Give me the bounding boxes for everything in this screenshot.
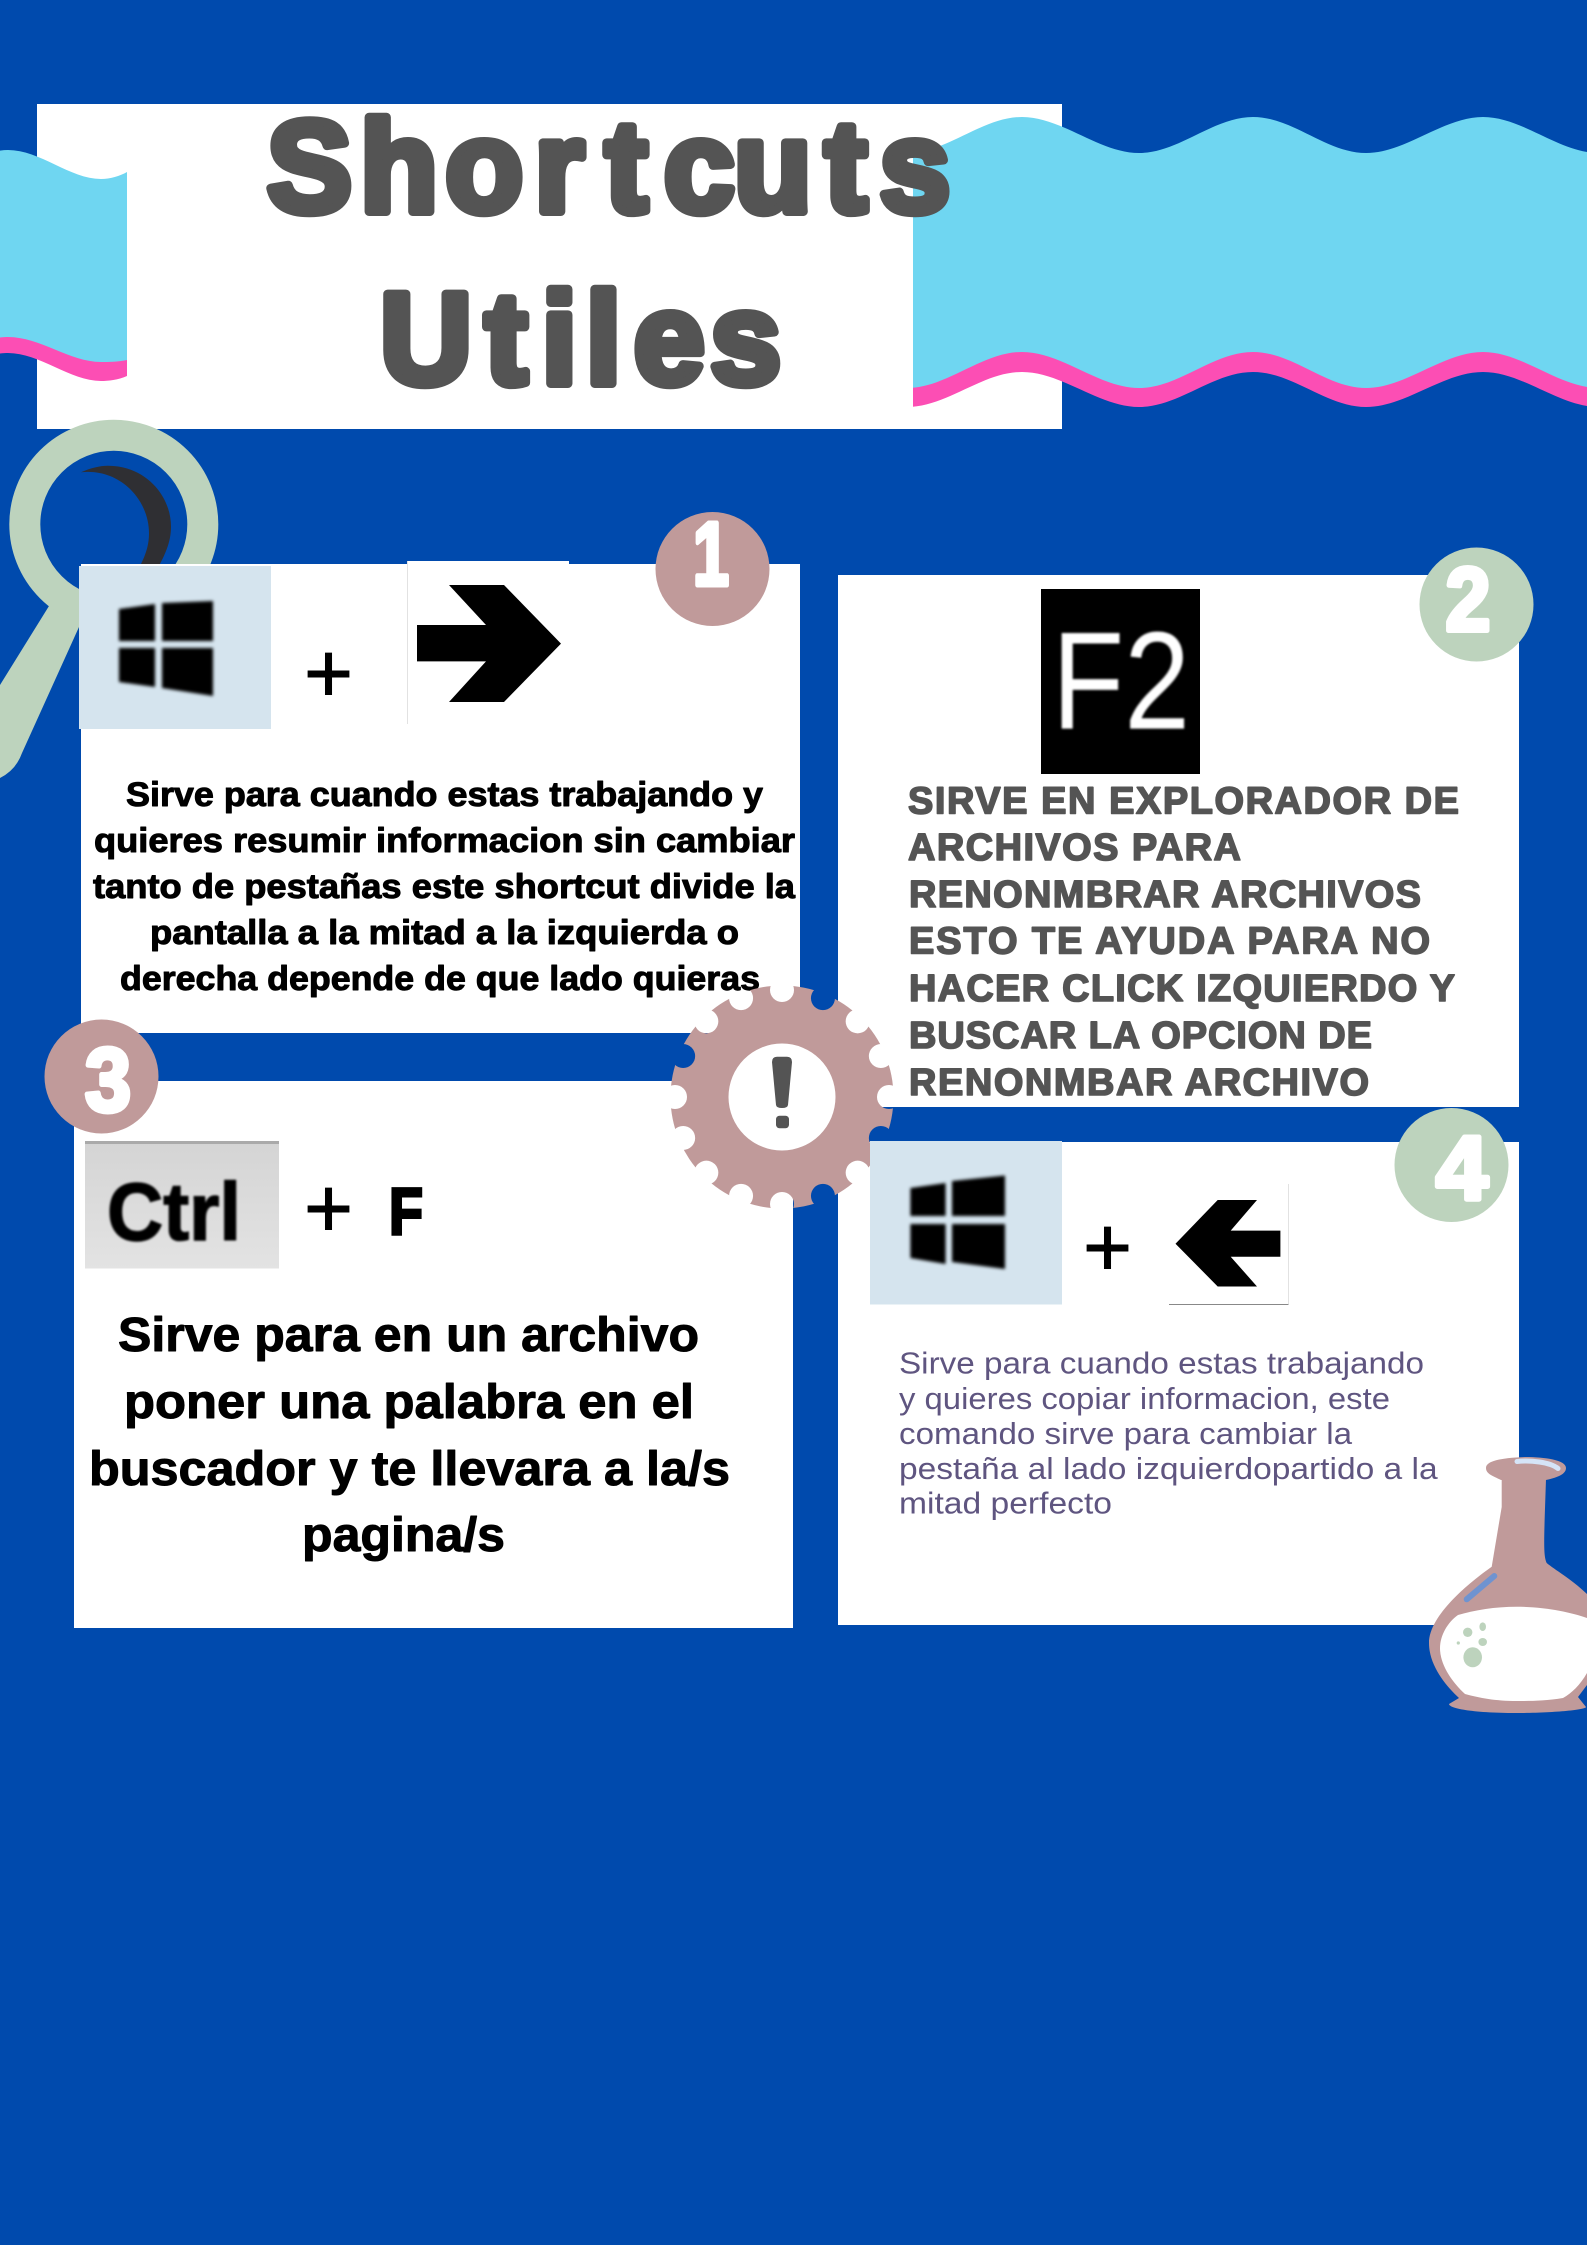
description 1: quieres resumir informacion sin cambiar — [94, 822, 795, 860]
panel 1 background — [81, 564, 800, 1033]
description 2: BUSCAR LA OPCION DE — [909, 1015, 1372, 1057]
key: F: F — [389, 1174, 423, 1248]
description 3: Sirve para en un archivo — [118, 1309, 699, 1362]
badge 2 — [1420, 548, 1534, 662]
description 1: Sirve para cuando estas trabajando y — [126, 776, 763, 814]
panel 2: F2 — [838, 548, 1534, 1107]
icon: magnifying glass — [0, 435, 203, 778]
description 2: HACER CLICK IZQUIERDO Y — [909, 968, 1455, 1010]
description 3 — [89, 1309, 730, 1562]
panel 4: windows + left arrow — [870, 1108, 1508, 1520]
title: Utiles — [380, 266, 781, 412]
icon: flask — [1429, 1457, 1587, 1713]
key: windows — [79, 566, 271, 729]
description 2 — [908, 780, 1459, 1104]
panel 1: windows + right arrow — [79, 505, 800, 1033]
description 2: ARCHIVOS PARA — [908, 827, 1241, 869]
description 3: buscador y te llevara a la/s — [89, 1443, 730, 1496]
wave banner: right — [907, 117, 1587, 407]
panel 3 background — [74, 1081, 793, 1628]
description 4: pestaña al lado izquierdopartido a la — [899, 1451, 1438, 1486]
icon: warning gear — [671, 986, 893, 1208]
description 3: poner una palabra en el — [124, 1376, 694, 1429]
badge 4 — [1394, 1108, 1508, 1222]
description 4: y quieres copiar informacion, este — [899, 1381, 1390, 1416]
panel 3: ctrl + f — [44, 1020, 793, 1628]
panel 4 background — [838, 1142, 1519, 1625]
description 1: tanto de pestañas este shortcut divide la — [93, 868, 796, 906]
plus sign: + — [304, 1161, 353, 1255]
badge 3: 3 — [85, 1031, 131, 1131]
plus sign: + — [304, 626, 353, 720]
badge 3 — [44, 1020, 158, 1134]
wave banner: left — [0, 150, 127, 381]
description 2: RENONMBRAR ARCHIVOS — [909, 874, 1421, 916]
badge 2: 2 — [1446, 550, 1490, 650]
key: F2: F2 — [1052, 604, 1190, 759]
description 4: mitad perfecto — [899, 1486, 1112, 1520]
description 2: RENONMBAR ARCHIVO — [909, 1062, 1369, 1104]
title backing panel — [37, 104, 1062, 429]
description 4: comando sirve para cambiar la — [899, 1416, 1353, 1451]
key: ctrl: Ctrl — [107, 1167, 241, 1258]
badge 1 — [656, 505, 770, 626]
title — [267, 94, 950, 412]
key: windows — [870, 1141, 1062, 1304]
description 4: Sirve para cuando estas trabajando — [899, 1346, 1424, 1380]
badge 4: 4 — [1436, 1119, 1488, 1219]
key: left arrow — [1169, 1184, 1289, 1305]
plus sign: + — [1083, 1200, 1132, 1294]
key: right arrow — [407, 561, 569, 724]
description 4 — [899, 1346, 1438, 1520]
badge 1: 1 — [693, 505, 729, 605]
description 2: SIRVE EN EXPLORADOR DE — [908, 780, 1459, 822]
description 1: pantalla a la mitad a la izquierda o — [150, 914, 739, 952]
title inner panel — [127, 104, 913, 429]
description 1: derecha depende de que lado quieras — [120, 960, 760, 998]
title: Shortcuts — [267, 94, 950, 240]
panel 2 background — [838, 575, 1519, 1107]
description 2: ESTO TE AYUDA PARA NO — [909, 921, 1430, 963]
description 3: pagina/s — [302, 1509, 505, 1562]
key: ctrl — [85, 1141, 279, 1268]
description 1 — [93, 776, 796, 998]
